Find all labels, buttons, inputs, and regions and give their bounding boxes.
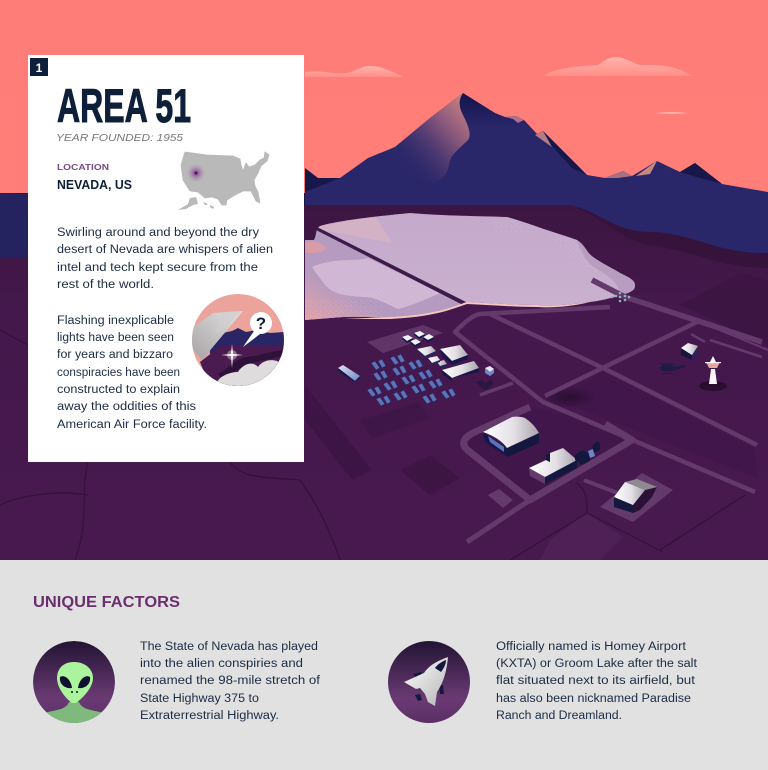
- icon: control tower: [699, 356, 727, 391]
- text block: nevada highway: The State of Nevada has played: [140, 641, 318, 653]
- lower hangar: [614, 479, 657, 513]
- text block: nevada highway: State Highway 375 to: [140, 693, 259, 705]
- text block: intro: intel and tech kept secure from the: [57, 262, 258, 274]
- title: AREA 51: [57, 79, 191, 132]
- big hangar: [483, 417, 539, 457]
- text block: airport names: has also been nicknamed Paradise: [496, 693, 691, 705]
- text block: nevada highway: renamed the 98-mile stretch of: [140, 675, 321, 687]
- text block: intro: Swirling around and beyond the dry: [57, 227, 259, 239]
- text block: airport names: [496, 641, 698, 722]
- clouds: [305, 57, 692, 114]
- icon: US map: [178, 152, 269, 210]
- ground details: [0, 205, 768, 560]
- sky background: [0, 0, 768, 560]
- text block: airport names: Ranch and Dreamland.: [496, 710, 622, 722]
- mountains: [0, 93, 768, 265]
- icon: mystery lights circle: [192, 294, 284, 386]
- icon: alien: [33, 641, 115, 730]
- text block: nevada highway: [140, 641, 321, 722]
- text block: lights: for years and bizzaro: [57, 349, 173, 361]
- speech bubble: [243, 312, 272, 347]
- small blocks: [575, 441, 600, 465]
- icon: space shuttle: [388, 641, 470, 723]
- number badge: 1: [36, 61, 43, 75]
- text block: lights: [57, 315, 207, 431]
- location value: NEVADA, US: [57, 178, 132, 192]
- pavements: [367, 325, 673, 522]
- solar panel arrays: [367, 354, 456, 406]
- location label: LOCATION: [57, 162, 109, 172]
- speech bubble: ?: [256, 314, 266, 333]
- icon: helicopter: [659, 363, 685, 374]
- panel: info card: [28, 55, 304, 462]
- building cluster: [338, 331, 494, 390]
- lake lights: [611, 292, 630, 302]
- text block: airport names: flat situated next to its airfield, but: [496, 675, 696, 687]
- text block: intro: rest of the world.: [57, 279, 154, 291]
- panel: unique factors background: [0, 560, 768, 770]
- text block: intro: desert of Nevada are whispers of alien: [57, 244, 273, 256]
- runway: [316, 227, 466, 304]
- text block: nevada highway: Extraterrestrial Highway.: [140, 710, 279, 722]
- text block: lights: Flashing inexplicable: [57, 315, 174, 327]
- text block: airport names: (KXTA) or Groom Lake after the salt: [496, 658, 698, 670]
- text block: intro: [57, 227, 273, 291]
- road network: [455, 280, 768, 542]
- text block: lights: away the oddities of this: [57, 401, 196, 413]
- text block: lights: lights have been seen: [57, 332, 174, 344]
- heading: unique factors: UNIQUE FACTORS: [33, 594, 180, 611]
- small building: [681, 343, 698, 360]
- number badge: [30, 58, 48, 76]
- text block: lights: constructed to explain: [57, 384, 180, 396]
- text block: airport names: Officially named is Homey Airport: [496, 641, 687, 653]
- stepped warehouse: [529, 448, 577, 484]
- year founded: YEAR FOUNDED: 1955: [56, 132, 183, 144]
- text block: nevada highway: into the alien conspiries and: [140, 658, 303, 670]
- text block: lights: American Air Force facility.: [57, 419, 207, 431]
- desert ground: [0, 205, 768, 560]
- text block: lights: conspiracies have been: [57, 367, 180, 379]
- salt lake: [305, 213, 635, 320]
- hangar yard: [464, 407, 632, 500]
